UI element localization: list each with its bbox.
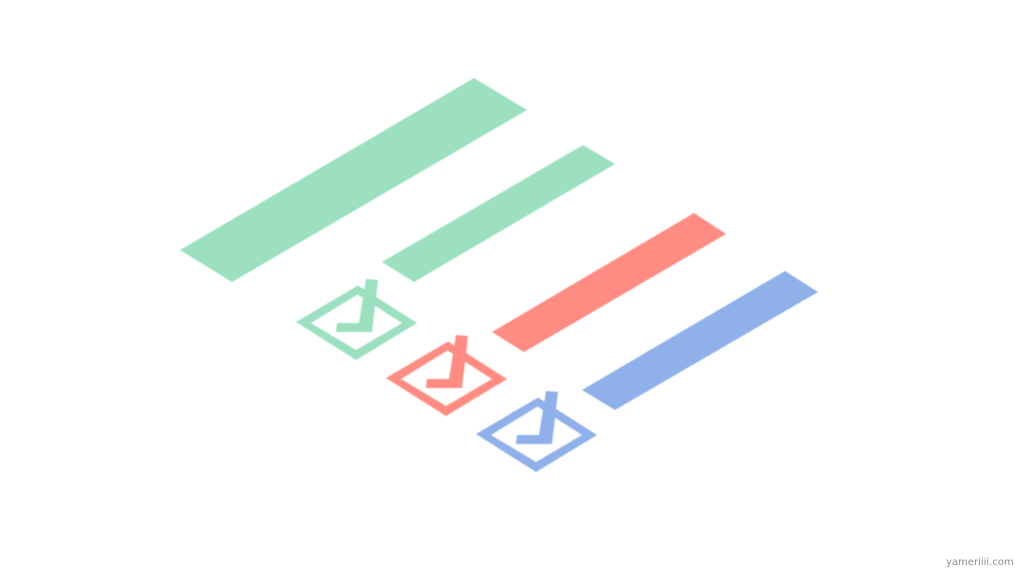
large green header bar: [180, 78, 527, 282]
green text bar: [382, 145, 615, 282]
icon: red checkbox with checkmark: [386, 335, 507, 416]
icon: blue checkbox with checkmark: [476, 391, 597, 472]
blue text bar: [582, 271, 818, 410]
watermark: yameriiii.com: [946, 557, 1014, 568]
checklist row 3: blue: [476, 271, 818, 472]
checklist row 1: green: [296, 145, 615, 360]
checklist row 2: red: [386, 213, 726, 416]
icon: green checkbox with checkmark: [296, 279, 417, 360]
red text bar: [492, 213, 726, 352]
